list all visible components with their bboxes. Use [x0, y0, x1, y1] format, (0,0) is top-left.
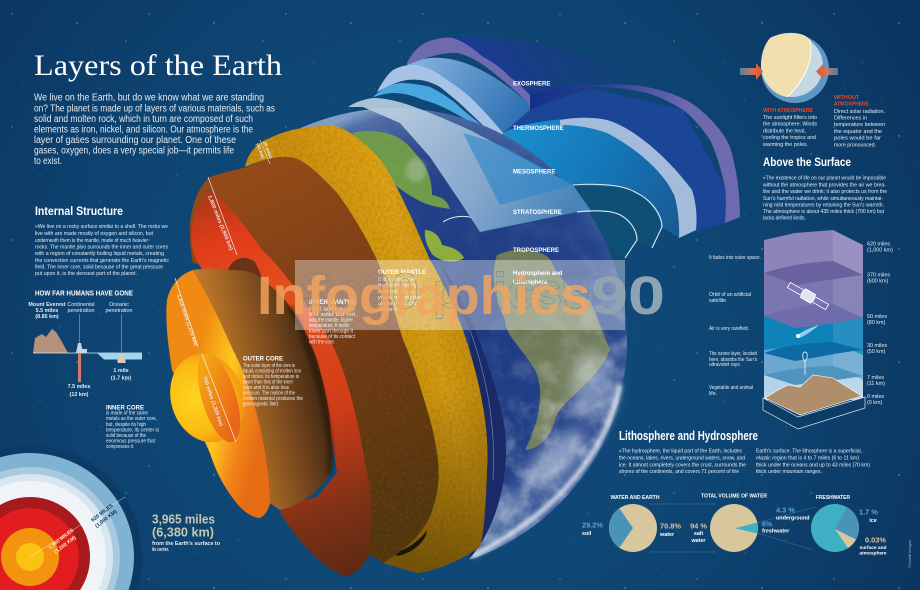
- column right labels: (80 km): [867, 320, 885, 326]
- north america: [353, 131, 450, 209]
- with atmosphere text: cooling the tropics and: [763, 135, 816, 141]
- intro text: gases, oxygen, does a very special job—it permits life: [34, 146, 234, 156]
- pie: water and earth: WATER AND EARTH: [610, 495, 660, 501]
- pie: total volume of water: 4.3 %: [776, 506, 795, 514]
- column right labels: 7 miles: [867, 375, 884, 381]
- distance callout: from the Earth's surface to: [152, 541, 221, 547]
- column left labels: The ozone layer, located: [709, 351, 757, 357]
- mantle brown layer: [190, 157, 439, 563]
- column left labels: It fades into outer space.: [709, 255, 761, 261]
- inner core text: compresses it.: [106, 444, 134, 450]
- atmosphere rims: [573, 184, 662, 258]
- internal structure text: underneath them is the mantle, made of much heavier: [35, 238, 148, 244]
- lithosphere text: thick under mountain ranges.: [756, 469, 822, 475]
- outer core text: pressure. The motion of the: [243, 390, 295, 396]
- measure: crust: 30 miles: [262, 141, 274, 160]
- atmosphere labels: EXOSPHERE: [513, 82, 550, 88]
- internal structure text: live with are made mostly of oxygen and silicon, but: [35, 231, 153, 237]
- strip highlight: [470, 330, 494, 480]
- without atmosphere text: WITHOUT: [834, 95, 860, 101]
- column right labels: (50 km): [867, 349, 885, 355]
- pie: freshwater: atmosphere: [859, 550, 887, 556]
- pie: total volume of water: [690, 494, 810, 552]
- inner mantle text: Next layer down,: [309, 306, 356, 312]
- above the surface text: The atmosphere is about 435 miles thick (700 km) but: [763, 209, 884, 215]
- inner mantle text: INNER MANTLE: [309, 299, 355, 306]
- pie: freshwater: 1.7 %: [859, 508, 878, 516]
- pie: water and earth: 29.2%: [582, 520, 603, 530]
- mantle red band: [191, 190, 371, 577]
- drill rig: [76, 343, 87, 353]
- mountain icon: [33, 329, 68, 353]
- column right labels: 620 miles: [867, 242, 890, 248]
- oceanic label: Oceanic: [109, 302, 129, 308]
- column layers: [764, 230, 863, 400]
- mesosphere sheet: [463, 133, 573, 205]
- layer surfaces: [764, 261, 863, 385]
- column right labels: 0 miles: [867, 394, 884, 400]
- outer core text: lower than that of the inner: [243, 380, 293, 386]
- above the surface heading: Above the Surface: [763, 157, 851, 169]
- dark ocean strip at the cut: [440, 262, 506, 558]
- intro text: solid and molten rock, which in turn are composed of such: [34, 114, 253, 125]
- borehole: [78, 353, 81, 382]
- submersible: [118, 354, 126, 363]
- stratosphere sheet: [348, 98, 592, 232]
- column right labels: 50 miles: [867, 314, 887, 320]
- without atmosphere text: Differences in: [834, 116, 867, 122]
- internal structure text: »We live on a rocky surface similar to a shell. The rocks we: [35, 224, 168, 230]
- pie: water and earth: soil: [582, 531, 592, 537]
- atmosphere column chart: [763, 230, 865, 429]
- atmosphere labels: Hydrosphere and: [513, 271, 563, 277]
- oceanic label: [106, 302, 132, 314]
- lithosphere text: »The hydrosphere, the liquid part of the Earth, includes: [619, 449, 742, 455]
- pie: water and earth: water: [659, 532, 675, 538]
- outer mantle text: above it.: [378, 307, 398, 313]
- continental depth: [68, 384, 90, 398]
- atmosphere radius label: [90, 503, 119, 530]
- inner core text: but, despite its high: [106, 422, 146, 428]
- continental label: Continental: [67, 302, 95, 308]
- oceanic label: penetration: [106, 308, 132, 314]
- without atmosphere text: poles would be far: [834, 136, 881, 142]
- with atmosphere text: [762, 108, 817, 148]
- mount everest label: Mount Everest: [28, 302, 66, 308]
- outer core: [159, 258, 332, 518]
- outer mantle text: over millions of: [378, 289, 414, 295]
- without atmosphere text: the equator and the: [834, 129, 882, 135]
- with atmosphere text: the atmosphere. Winds: [763, 121, 817, 127]
- outer mantle text: years, moving the: [378, 295, 421, 301]
- pie: water and earth: [582, 495, 681, 552]
- internal structure text: rocks. The mantle also surrounds the inner and outer cores: [35, 244, 168, 250]
- exosphere shell: [407, 38, 740, 233]
- diagram heading: HOW FAR HUMANS HAVE GONE: [35, 290, 133, 298]
- without atmosphere text: temperature between: [834, 122, 885, 128]
- pie: total volume of water: underground: [776, 516, 810, 522]
- mount everest label: (8.85 km): [35, 314, 59, 320]
- outer mantle text: [378, 269, 426, 313]
- column left labels: [709, 255, 761, 397]
- inner mantle text: temperature. It melts: [309, 323, 349, 329]
- inner core text: [106, 404, 159, 450]
- intro text: on? The planet is made up of layers of various materials, such as: [34, 104, 275, 114]
- measure: mantle: [206, 177, 237, 255]
- continental label: [67, 302, 95, 314]
- atmosphere radius label: (1,000 KM): [94, 509, 119, 530]
- with atmosphere text: The sunlight filters into: [763, 115, 817, 121]
- intro text: to exist.: [34, 156, 62, 167]
- internal structure text: [34, 224, 169, 277]
- above the surface text: without the atmosphere that provides the air we brea-: [762, 182, 886, 188]
- column left labels: here, absorbs the Sun's: [709, 357, 757, 363]
- without atmosphere text: [834, 95, 885, 148]
- left arrow: [740, 63, 763, 80]
- central america: [425, 216, 473, 261]
- outer core text: and nickel. Its temperature is: [243, 374, 299, 380]
- watermark: So90 phics9: [300, 263, 590, 319]
- ring radius line: [30, 497, 125, 557]
- measure: inner core: [201, 354, 236, 442]
- small globe diagram: [740, 33, 838, 103]
- inner mantle text: because of its contact: [309, 334, 355, 340]
- outer mantle text: that flows slowly: [378, 283, 417, 289]
- core radius label: 1,960 MILES: [48, 527, 76, 551]
- distance callout: (6,380 km): [152, 524, 214, 540]
- column right labels: 30 miles: [867, 343, 887, 349]
- image credit: ©GeoMI Images: [908, 540, 912, 568]
- lithosphere heading: Lithosphere and Hydrosphere: [619, 429, 758, 443]
- pie: freshwater: 0.03%: [865, 536, 886, 544]
- measure: outer core: 1,410 miles (2,270 km): [175, 294, 198, 347]
- outer mantle text: It is a solid layer: [378, 277, 417, 283]
- column left labels: Orbit of an artificial: [709, 292, 751, 298]
- pie: water and earth: 70.8%: [660, 522, 681, 530]
- pie connectors: [650, 504, 815, 552]
- intro text: We live on the Earth, but do we know what we are standing: [34, 92, 264, 104]
- outer core text: OUTER CORE: [243, 356, 284, 362]
- outer core edge shadow: [290, 307, 331, 473]
- atmosphere labels: STRATOSPHERE: [513, 210, 562, 216]
- oceanic depth: 1 mile: [113, 368, 129, 374]
- inner mantle text: was the mantle, higher: [308, 318, 353, 324]
- radial measures: [175, 140, 274, 442]
- outer core text: The outer layer of the core is: [243, 363, 295, 369]
- above the surface text: Sun's harmful radiation, while simultaneously maintai-: [763, 196, 883, 202]
- column left labels: Air is very rarefied.: [709, 326, 749, 332]
- lithosphere text: ice. It almost completely covers the crust, surrounds the: [619, 462, 746, 468]
- mount everest label: 5.5 miles: [36, 308, 58, 314]
- column right labels: (0 km): [867, 400, 882, 406]
- inner core text: solid because of the: [106, 433, 146, 439]
- inner core text: metals as the outer core,: [106, 416, 157, 422]
- column right labels: [867, 242, 893, 406]
- lithosphere text: shores of the continents, and covers 71 percent of the: [619, 469, 739, 475]
- internal structure text: field. The inner core, solid because of the great pressure: [35, 264, 163, 270]
- pie: total volume of water: TOTAL VOLUME OF WATER: [701, 494, 767, 500]
- watermark: Infographics: [257, 266, 591, 326]
- measure: mantle: 1,800 miles (2,900 km): [206, 195, 234, 252]
- outer core text: molten material produces the: [243, 396, 303, 402]
- inner core: [159, 344, 255, 452]
- without atmosphere text: Direct solar radiation.: [834, 109, 885, 115]
- above the surface text: ning mild temperatures by retaining the Sun's warmth.: [763, 203, 884, 209]
- column left labels: Vegetable and animal: [709, 385, 753, 391]
- distance callout: [152, 512, 221, 553]
- earth globe: [300, 108, 627, 560]
- above the surface text: lacks defined limits.: [763, 216, 806, 222]
- above the surface text: »The existence of life on our planet would be impossible: [763, 175, 886, 181]
- inner core text: is made of the same: [106, 410, 148, 416]
- balloon icon: [803, 352, 807, 375]
- without atmosphere text: more pronounced.: [834, 142, 876, 148]
- without atmosphere text: ATMOSPHERE: [834, 102, 869, 108]
- atmosphere translucent sheets: [348, 98, 662, 258]
- outer mantle text: plates of the crust: [378, 301, 421, 307]
- column right labels: (1,000 km): [867, 248, 893, 254]
- inner core text: INNER CORE: [106, 404, 145, 412]
- oceanic depth: [111, 368, 131, 382]
- yellow crust layer: [245, 126, 488, 573]
- atmosphere labels: MESOSPHERE: [513, 170, 555, 176]
- measure: crust: [255, 140, 274, 164]
- outer core text: liquid, consisting of molten iron: [243, 368, 301, 374]
- inner mantle text: [308, 299, 357, 346]
- with atmosphere text: warming the poles.: [762, 142, 808, 148]
- mesosphere shell: [573, 185, 662, 258]
- atmosphere labels: THERMOSPHERE: [513, 126, 564, 132]
- mount everest label: [28, 302, 66, 320]
- internal structure heading: Internal Structure: [35, 206, 123, 218]
- pie: freshwater: [811, 495, 887, 556]
- pie: total volume of water: freshwater: [762, 528, 790, 534]
- oceanic depth: (1.7 km): [111, 376, 131, 382]
- title: Layers of the Earth: [34, 49, 282, 82]
- continental label: penetration: [68, 308, 94, 314]
- mantle hollow bump: [228, 258, 262, 278]
- with atmosphere text: distribute the heat,: [763, 128, 806, 134]
- measure: inner core: 750 miles (1,220 km): [201, 376, 224, 427]
- pie: total volume of water: 94 %: [690, 522, 707, 530]
- inner mantle text: with the core.: [308, 340, 335, 346]
- intro text: layer of gases surrounding our planet. One of these: [34, 135, 236, 146]
- lithosphere text: [619, 449, 870, 475]
- outer core brown: [193, 268, 332, 510]
- pie: freshwater: surface and: [860, 545, 887, 551]
- column right labels: (600 km): [867, 278, 888, 284]
- outer mantle text: OUTER MANTLE: [378, 269, 426, 276]
- pie: freshwater: FRESHWATER: [816, 495, 850, 501]
- column right labels: 370 miles: [867, 272, 890, 278]
- intro text: elements as iron, nickel, and silicon. Our atmosphere is the: [34, 124, 253, 136]
- lithosphere text: thick under the oceans and up to 43 miles (70 km): [756, 462, 870, 468]
- watermark: [257, 260, 665, 330]
- inner mantle text: lower part through it: [309, 328, 353, 334]
- distance callout: its center.: [152, 547, 169, 553]
- satellite icon: [786, 281, 830, 311]
- with atmosphere text: WITH ATMOSPHERE: [763, 108, 813, 114]
- intro text: [34, 92, 275, 167]
- right arrow: [816, 63, 838, 80]
- earth cross-section rings: [0, 445, 142, 590]
- drill lines: [80, 314, 122, 352]
- pie: freshwater: ice: [869, 518, 877, 524]
- column left labels: life.: [709, 391, 717, 397]
- inner core text: temperature, its center is: [106, 428, 159, 434]
- internal structure text: put upon it, is the densest part of the planet.: [35, 271, 137, 277]
- ground and ocean: [33, 353, 142, 360]
- atmosphere labels: TROPOSPHERE: [513, 248, 559, 254]
- internal structure text: with a region of constantly boiling liquid metals, creating: [34, 251, 164, 257]
- block base: [763, 397, 865, 429]
- outer core text: [243, 356, 303, 408]
- continental depth: (12 km): [70, 392, 89, 398]
- distance callout: 3,965 miles: [152, 512, 215, 526]
- continental depth: 7.5 miles: [68, 384, 90, 390]
- outer core text: geomagnetic field.: [243, 402, 279, 408]
- atmosphere labels: Lithosphere: [513, 280, 548, 286]
- pie: total volume of water: 6%: [762, 522, 773, 528]
- lithosphere text: elastic region that is 4 to 7 miles (6 to 11 km): [756, 455, 859, 461]
- pie: total volume of water: salt: [694, 531, 703, 537]
- outer core text: core and it is also less: [243, 385, 289, 391]
- lithosphere text: the oceans, lakes, rivers, underground waters, snow, and: [619, 455, 745, 461]
- column left labels: ultraviolet rays.: [709, 362, 741, 368]
- thermosphere shell: [373, 65, 697, 238]
- above the surface text: [762, 175, 887, 222]
- atmosphere radius label: 620 MILES: [90, 503, 115, 524]
- watermark: 90: [591, 266, 665, 326]
- comet icon: [796, 325, 819, 338]
- inner core text: enormous pressure that: [106, 438, 155, 444]
- column right labels: (11 km): [867, 381, 885, 387]
- internal structure text: the convection currents that generate the Earth's magnetic: [35, 258, 169, 264]
- diagram: how far humans have gone: [28, 290, 142, 398]
- above the surface text: the and the water we drink; it also protects us from the: [763, 189, 887, 195]
- pie: total volume of water: water: [690, 538, 706, 544]
- clouds: [470, 222, 627, 560]
- south america: [494, 250, 610, 450]
- measure: crust: (50 km): [255, 143, 266, 160]
- atmosphere labels: [513, 82, 564, 286]
- atmosphere shells: [373, 38, 740, 258]
- core radius label: (3,200 KM): [53, 535, 78, 556]
- outer core orange: [166, 270, 270, 518]
- inner mantle text: it is solid but hot.: [309, 312, 357, 318]
- lithosphere text: Earth's surface. The lithosphere is a superficial,: [756, 449, 862, 455]
- column left labels: satellite: [709, 298, 726, 304]
- mountain terrain: [765, 375, 862, 415]
